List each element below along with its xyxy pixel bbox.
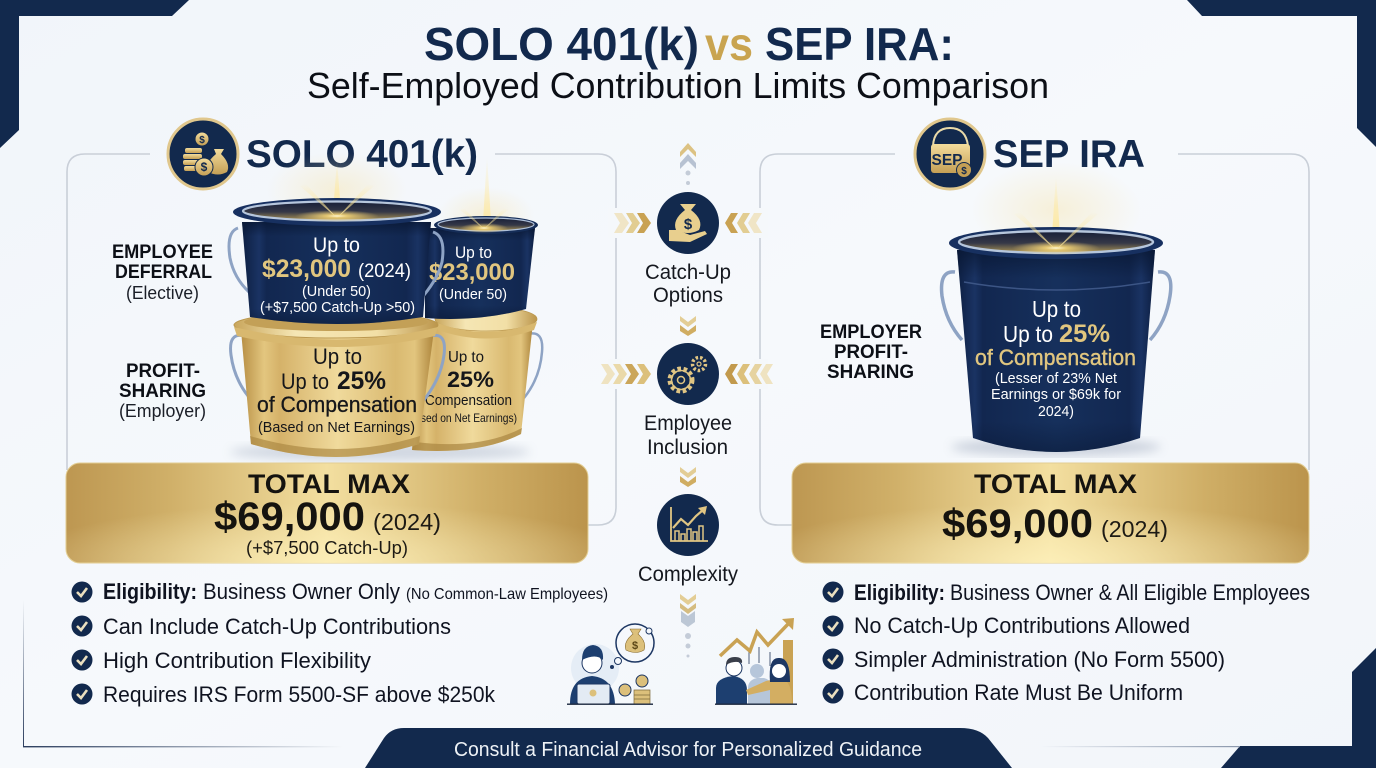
bucket: SEP IRA: Up to [1003,321,1053,347]
bullet: eligibility [822,580,1310,605]
label: employee deferral: DEFERRAL [115,262,212,283]
arrow: down chevrons [680,316,696,336]
total max bar: (+$7,500 Catch-Up) [246,538,408,558]
bullet: administration: Simpler Administration (No Form 5500) [854,647,1225,672]
bullet: uniform rate: Contribution Rate Must Be Uniform [854,680,1183,705]
label: catch-up options: Catch-Up [645,261,731,284]
title [424,18,954,70]
icon: coins and money bags: $ [201,160,208,174]
large navy bucket: (2024) [358,261,411,282]
arrows: row one [608,208,768,238]
icon: gears [657,343,719,405]
arrows: row two [601,359,773,389]
small gold bucket: Compensation [425,392,512,409]
icon: SEP bucket [915,119,985,189]
label: employee inclusion: Employee [644,412,732,435]
bucket: SEP IRA: (Lesser of 23% Net [995,370,1118,387]
label: profit-sharing [119,361,206,421]
total max bar [66,463,588,563]
feature list: Solo 401(k) [72,579,608,707]
illustration: team and growth arrow [715,618,797,705]
label: employer profit-sharing: PROFIT- [834,342,908,363]
icon: coins and money bags: $ [199,135,205,146]
small navy bucket: $23,000 [429,259,515,286]
subtitle: Self-Employed Contribution Limits Comparison [307,65,1049,106]
label: employer profit-sharing: EMPLOYER [820,322,922,343]
center comparison column [567,143,797,705]
total max bar: TOTAL MAX [974,469,1137,499]
panel: Solo 401(k) [66,119,616,707]
icon: catch-up money bag in hand: $ [684,216,693,233]
large gold bucket text: of Compensation [257,392,417,417]
large navy bucket: $23,000 [262,255,351,283]
bucket: SEP IRA: 2024) [1038,403,1074,420]
icon: coins and money bags [168,119,238,189]
bullet: catch-up: Can Include Catch-Up Contributions [103,614,451,639]
label: employer profit-sharing: SHARING [827,362,914,383]
total max bar: $69,000 [214,495,365,539]
small gold bucket [405,307,542,451]
arrow: down chevrons [680,467,696,487]
icon: catch-up money bag in hand [657,192,719,254]
label: catch-up options [645,261,731,307]
footer banner: Consult a Financial Advisor for Personalized Guidance [454,739,922,761]
label: profit-sharing: (Employer) [119,401,206,421]
bucket stack [229,152,542,461]
title: SOLO 401(k) [424,18,699,70]
large gold bucket text: (Based on Net Earnings) [258,419,415,436]
frame corner: top left [0,0,189,148]
large gold bucket text: 25% [337,367,386,395]
label: employee deferral [112,242,213,303]
panel heading: SEP IRA [915,119,1145,189]
total max bar: (2024) [373,509,441,535]
illustration: advisor at laptop [567,624,654,705]
label: employer profit-sharing [820,322,922,383]
total max bar: TOTAL MAX [248,469,410,499]
frame corner: bottom right [1221,648,1376,768]
small navy bucket [425,155,538,319]
icon: SEP bucket: $ [961,166,967,177]
icon: SEP bucket: SEP [932,152,963,169]
bucket: SEP IRA: Up to [1032,296,1081,322]
bullet: eligibility: Business Owner Only [203,579,400,604]
label: profit-sharing: PROFIT- [126,361,200,382]
large gold bucket text: Up to [281,369,329,394]
small gold bucket: 25% [447,367,494,392]
bullet: eligibility: Eligibility: [854,580,945,605]
bullet: eligibility [72,579,608,604]
large navy bucket: Up to [313,234,360,257]
title: vs [705,18,753,70]
large gold bucket text: Up to [313,344,362,369]
arrow: top chevrons [680,143,696,185]
small gold bucket: Up to [448,349,484,366]
small gold bucket: (Based on Net Earnings) [405,411,517,425]
bullet: form 5500: Requires IRS Form 5500-SF above $250k [103,682,496,707]
bullet: eligibility: Business Owner & All Eligible Employees [950,580,1310,605]
bucket: SEP IRA: of Compensation [975,345,1136,370]
arrow: bottom chevrons [680,594,696,658]
label: employee inclusion [644,412,732,459]
bullet: eligibility: (No Common-Law Employees) [406,586,608,603]
large navy bucket [229,152,443,324]
frame corner: top right [1187,0,1376,147]
feature list: SEP IRA [822,580,1310,705]
panel heading: Solo 401(k) [168,119,478,189]
large navy bucket: (Under 50) [302,283,371,300]
bucket: SEP IRA [942,162,1171,456]
bucket: SEP IRA: 25% [1059,320,1110,348]
large navy bucket: (+$7,500 Catch-Up >50) [260,299,415,316]
label: complexity: Complexity [638,563,738,586]
label: profit-sharing: SHARING [119,381,206,402]
heading text: SOLO 401(k) [246,133,478,176]
footer banner [365,728,1012,768]
bucket: SEP IRA: Earnings or $69k for [991,386,1121,403]
label: employee deferral: EMPLOYEE [112,242,213,263]
large gold bucket [231,312,444,457]
label: employee inclusion: Inclusion [647,436,728,459]
panel: SEP IRA [760,119,1310,705]
small navy bucket: (Under 50) [439,286,507,303]
illustration: advisor at laptop: $ [632,640,638,652]
total max bar: $69,000 [942,502,1093,546]
bullet: eligibility: Eligibility: [103,579,197,604]
bullet: catch-up: No Catch-Up Contributions Allowed [854,613,1190,638]
icon: growth chart [657,494,719,556]
small navy bucket: Up to [455,243,492,262]
label: employee deferral: (Elective) [126,283,199,303]
heading text: SEP IRA [993,133,1145,176]
total max bar: (2024) [1101,516,1168,542]
title: SEP IRA: [765,18,954,70]
label: catch-up options: Options [653,284,723,307]
bullet: flexibility: High Contribution Flexibility [103,648,371,673]
total max bar [792,463,1309,563]
large gold bucket text [257,344,417,436]
